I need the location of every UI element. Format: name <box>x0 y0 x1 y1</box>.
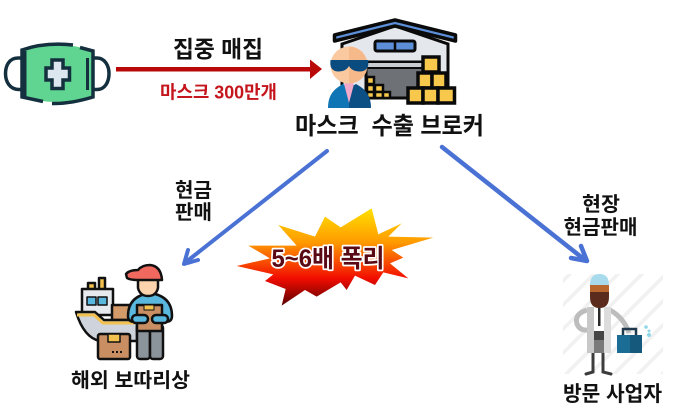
courier <box>126 265 172 359</box>
callout: 5 to 6 times profit starburst: 5~6배 폭리 <box>272 245 384 273</box>
parcel <box>98 334 130 359</box>
callout: 5 to 6 times profit starburst <box>237 208 433 306</box>
legs and shoes <box>586 352 611 374</box>
label: on-site cash sale: 현금판매 <box>564 216 638 239</box>
toolbox <box>617 329 642 353</box>
ship <box>76 278 137 341</box>
icon: overseas peddler with ship <box>76 265 172 359</box>
coat <box>587 307 611 353</box>
arrow: broker to door-to-door seller <box>442 147 587 261</box>
stacked boxes <box>408 57 454 103</box>
label: on-site cash sale <box>564 193 638 239</box>
hatched background <box>563 274 663 374</box>
label: cash sale <box>175 179 212 224</box>
heading: concentrated buying: 집중 매집 <box>173 36 263 62</box>
label: on-site cash sale: 현장 <box>582 193 620 216</box>
warehouse building <box>334 20 456 98</box>
icon: door-to-door seller <box>563 274 663 374</box>
arrow: red flow to broker <box>116 60 322 79</box>
coat arm loops <box>576 310 629 333</box>
heading: mask export broker: 마스크 수출 브로커 <box>295 113 484 140</box>
label: 3 million masks: 마스크 300만개 <box>160 82 277 102</box>
arrow: broker to overseas peddler <box>184 151 327 264</box>
label: door-to-door seller: 방문 사업자 <box>563 383 662 406</box>
label: cash sale: 판매 <box>175 201 212 224</box>
icon: warehouse with broker <box>328 20 456 108</box>
label: cash sale: 현금 <box>175 179 212 202</box>
icon: face mask <box>6 44 109 104</box>
small boxes <box>367 77 390 98</box>
label: overseas peddler: 해외 보따리상 <box>71 369 190 392</box>
broker figure <box>328 46 371 108</box>
head <box>590 286 609 308</box>
